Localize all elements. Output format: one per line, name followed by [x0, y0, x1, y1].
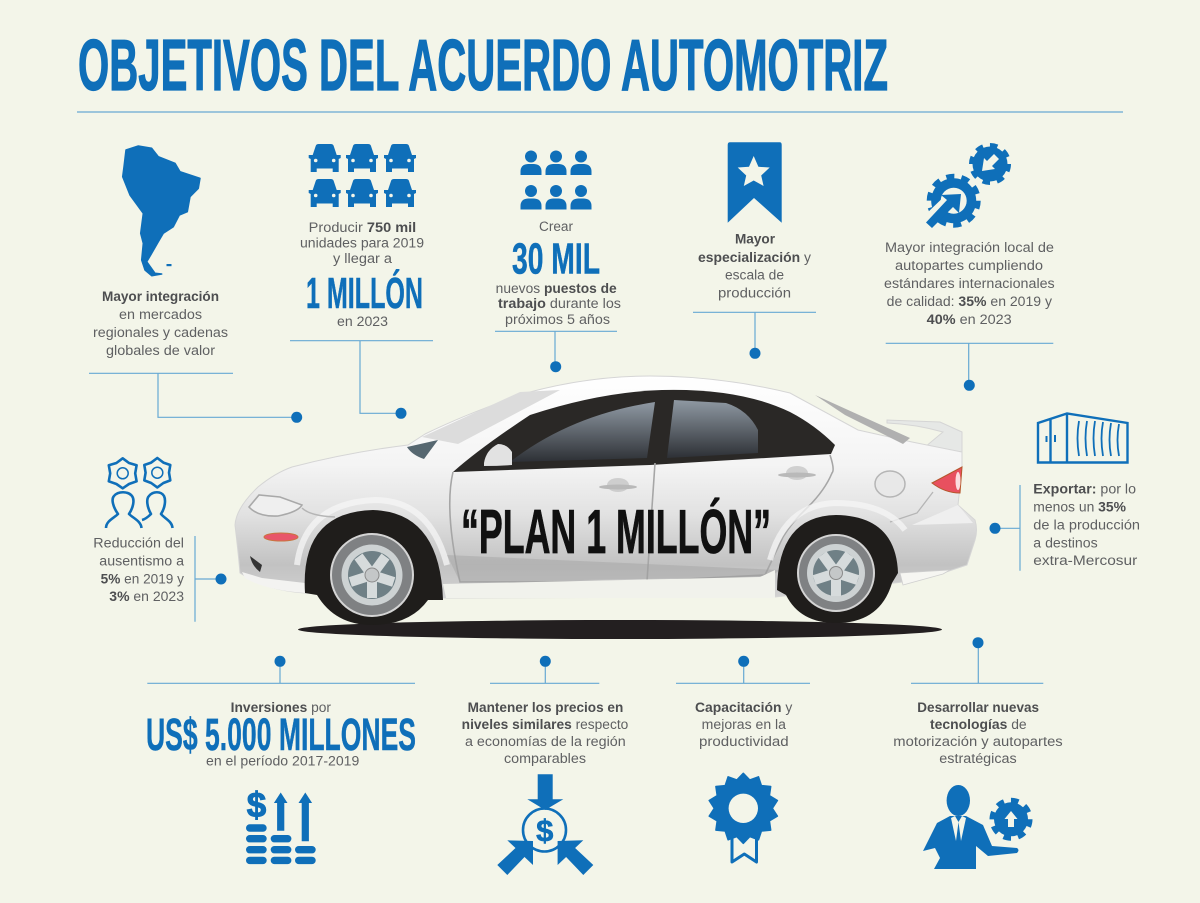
windscreen and roof trim [422, 390, 560, 444]
text: mayor integración: Mayor integración [102, 289, 219, 304]
spoiler [887, 420, 962, 452]
text: integración local: Mayor integración local de [885, 240, 1054, 255]
front window glass [510, 402, 655, 462]
text: producir: en 2023 [337, 314, 388, 329]
fuel cap [875, 471, 905, 497]
text: mayor integración: regionales y cadenas [93, 325, 228, 340]
text: crear: Crear [539, 219, 573, 234]
car illustration [235, 376, 976, 639]
headlight [249, 495, 335, 517]
text: precios: Mantener los precios en [468, 700, 623, 715]
connector [886, 343, 1053, 391]
connector [290, 341, 433, 419]
text: exportar: de la producción [1033, 518, 1140, 532]
panel: producción [290, 144, 433, 419]
figure: US$ 5.000 millones: US$ 5.000 MILLONES [146, 709, 416, 760]
panel: capacitación [676, 656, 810, 862]
side mirror [484, 444, 512, 466]
panel: exportar [990, 414, 1140, 571]
text: integración local: de calidad: 35% en 2019 y [887, 294, 1052, 309]
icon: ribbon with star [728, 142, 782, 223]
icon: six cars [309, 144, 416, 207]
icon: six people [520, 150, 592, 210]
icon: shipping container [1038, 414, 1128, 462]
connector [676, 656, 810, 683]
text: ausentismo: Reducción del [93, 536, 184, 550]
icon: businessman with gear [923, 785, 1030, 869]
text: tecnologías: motorización y autopartes [893, 734, 1063, 749]
door lines [450, 455, 833, 582]
bumper vent [250, 556, 262, 572]
car label: “PLAN 1 MILLÓN” [461, 498, 771, 567]
text: inversiones [206, 700, 359, 768]
text: ausentismo: ausentismo a [99, 554, 185, 568]
text: exportar: Exportar: por lo [1033, 482, 1136, 496]
icon: coins and rising arrows: $ [247, 786, 266, 825]
text: crear: nuevos puestos de [496, 281, 617, 296]
panel: especialización [693, 142, 816, 359]
front vent [407, 440, 438, 459]
text: capacitación [695, 700, 793, 749]
text: precios: a economías de la región [465, 734, 626, 749]
text: mayor especialización: Mayor [735, 232, 776, 246]
connector [89, 373, 302, 423]
text: mayor especialización: escala de [725, 268, 784, 282]
car shadow [298, 620, 942, 639]
text: exportar [1033, 482, 1140, 568]
text: capacitación: mejoras en la [702, 717, 787, 732]
text: integración local: autopartes cumpliendo [895, 258, 1043, 273]
rear window glass [667, 400, 758, 458]
icon: dollar with converging arrows: $ [536, 813, 553, 848]
text: inversiones: en el período 2017-2019 [206, 754, 359, 768]
icon: workers with gears [106, 458, 172, 528]
text: precios: comparables [504, 751, 586, 766]
side sill [443, 570, 775, 598]
text: integración local: 40% en 2023 [927, 312, 1012, 327]
text: precios [462, 700, 628, 766]
connector [693, 312, 816, 359]
panel: ausentismo [93, 458, 226, 622]
quarter panel line [890, 492, 933, 522]
panel: empleo [495, 150, 621, 372]
text: inversiones: Inversiones por [231, 700, 332, 715]
text: exportar: extra-Mercosur [1033, 553, 1138, 568]
text: crear: próximos 5 años [505, 312, 610, 327]
text: precios: niveles similares respecto [462, 717, 628, 732]
text: crear: trabajo durante los [498, 296, 621, 311]
rear bumper highlight [912, 505, 973, 525]
icon: medal [709, 773, 777, 862]
connector [495, 331, 617, 372]
text: producir: y llegar a [333, 251, 393, 266]
text: producir: unidades para 2019 [300, 236, 424, 250]
icon: dollar with converging arrows [497, 774, 593, 875]
text: mayor integración [93, 289, 228, 358]
text: producir [300, 220, 424, 329]
door handles [599, 466, 816, 492]
text: ausentismo: 5% en 2019 y [101, 572, 184, 586]
figure: 1 millón: 1 MILLÓN [306, 268, 423, 318]
front bumper lip [242, 572, 305, 593]
front side marker [264, 533, 298, 541]
connector [147, 656, 415, 683]
panel: integración regional [89, 146, 302, 423]
text: integración local [884, 240, 1055, 327]
icon: two gears with arrows [926, 146, 1008, 228]
text: ausentismo: 3% en 2023 [109, 589, 184, 604]
window frame [453, 390, 835, 472]
connector [911, 637, 1043, 683]
text: crear [496, 219, 621, 327]
text: tecnologías: estratégicas [939, 751, 1017, 766]
connector [195, 536, 226, 622]
text: integración local: estándares internacionales [884, 276, 1055, 291]
panel: inversiones [146, 656, 416, 864]
tail light [932, 467, 962, 493]
text: tecnologías: tecnologías de [930, 717, 1027, 732]
text: capacitación: productividad [699, 734, 789, 749]
text: ausentismo [93, 536, 185, 604]
text: tecnologías: Desarrollar nuevas [917, 700, 1039, 715]
front wheel [305, 510, 443, 625]
text: mayor especialización [698, 232, 811, 300]
text: exportar: menos un 35% [1033, 500, 1126, 514]
text: mayor integración: globales de valor [106, 343, 216, 358]
text: capacitación: Capacitación y [695, 700, 793, 715]
text: mayor integración: en mercados [119, 307, 202, 322]
text: mayor especialización: producción [718, 286, 791, 300]
figure: 30 mil: 30 MIL [512, 234, 600, 284]
text: exportar: a destinos [1033, 536, 1098, 550]
text: tecnologías [893, 700, 1063, 766]
rear bumper lip [900, 570, 950, 585]
text: producir: Producir 750 mil [309, 220, 416, 235]
panel: integración de autopartes [884, 146, 1055, 391]
icon: coins and rising arrows [246, 786, 316, 864]
car body [235, 376, 976, 598]
panel: precios [462, 656, 628, 875]
rear wheel [777, 515, 898, 623]
text: mayor especialización: especialización y [698, 250, 811, 265]
connector [990, 485, 1020, 571]
icon: south america map [123, 146, 200, 276]
arch highlights and crease [297, 500, 905, 565]
panel: tecnologías [893, 637, 1063, 869]
connector [490, 656, 599, 683]
door lower shade [447, 555, 780, 582]
